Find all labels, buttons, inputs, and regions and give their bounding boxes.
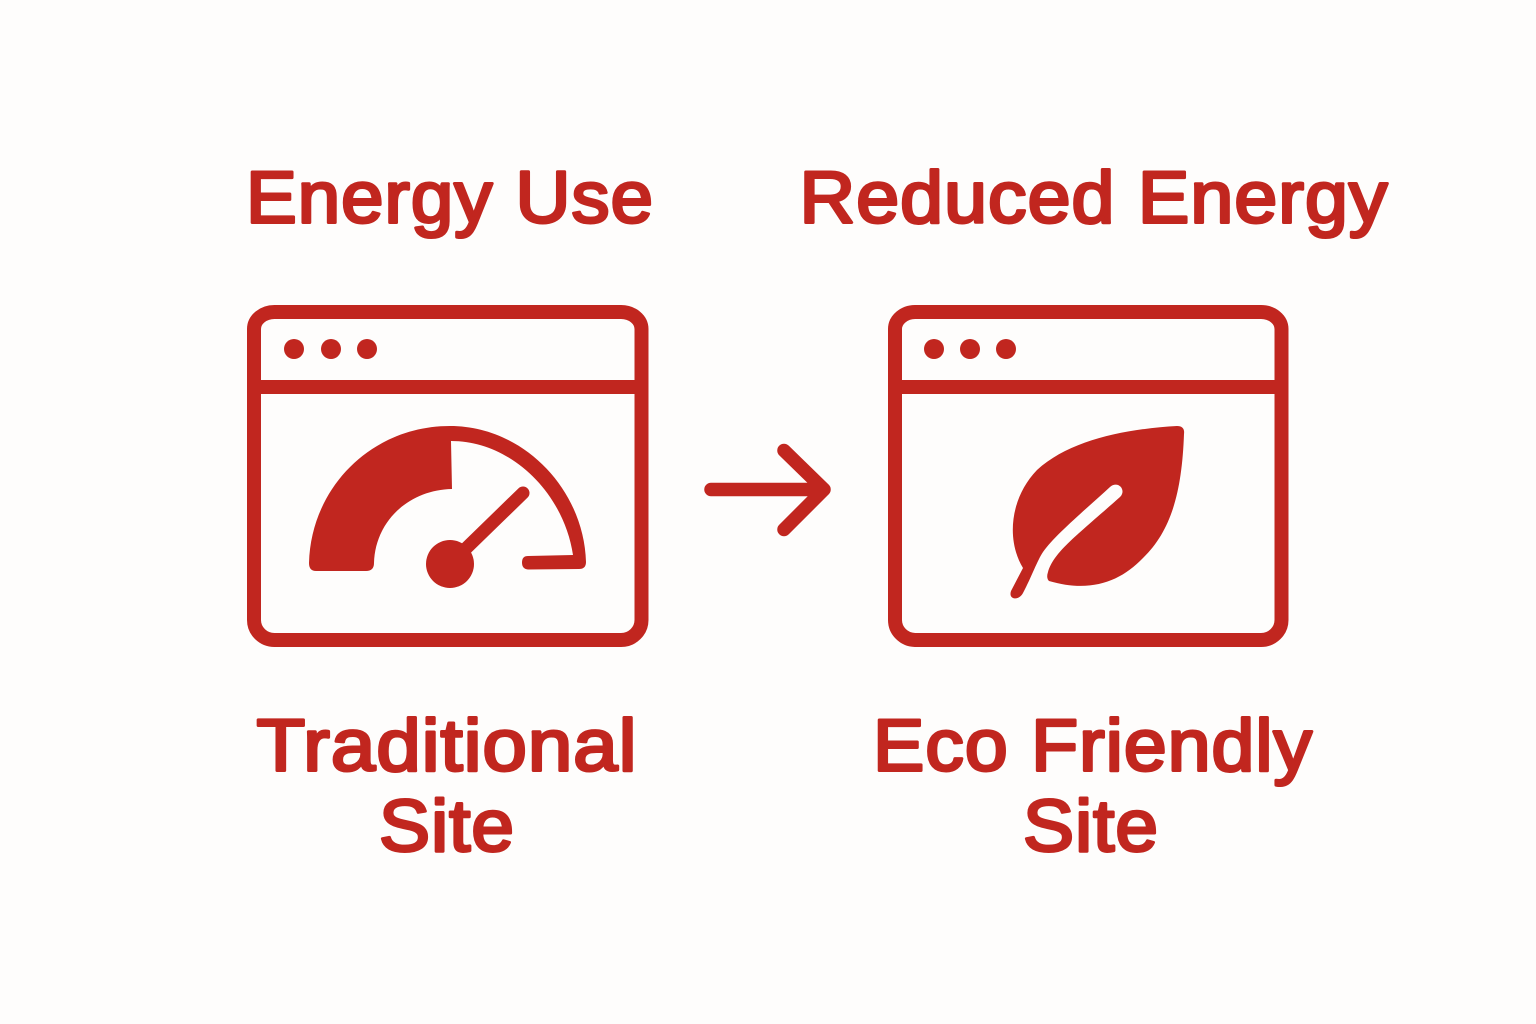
arrow bbox=[711, 450, 824, 530]
label: Traditional Site: Site bbox=[379, 786, 515, 867]
browser window frame bbox=[895, 312, 1282, 640]
label: Eco Friendly Site: Eco Friendly bbox=[873, 706, 1313, 786]
label: Eco Friendly Site bbox=[873, 706, 1313, 867]
icon: eco site browser with leaf bbox=[895, 312, 1282, 640]
label: Traditional Site: Traditional bbox=[256, 706, 638, 786]
heading: Energy Use: Energy Use bbox=[246, 158, 654, 238]
gauge needle bbox=[450, 493, 523, 564]
icon: traditional site browser with gauge bbox=[254, 312, 642, 640]
label: Eco Friendly Site: Site bbox=[1023, 786, 1159, 867]
browser window frame bbox=[254, 312, 642, 640]
window dots bbox=[284, 339, 377, 359]
gauge arc bbox=[309, 426, 586, 571]
label: Traditional Site bbox=[256, 706, 638, 867]
window dots bbox=[924, 339, 1016, 359]
gauge hub bbox=[426, 540, 474, 588]
heading: Reduced Energy: Reduced Energy bbox=[800, 158, 1388, 238]
leaf bbox=[1010, 426, 1184, 598]
